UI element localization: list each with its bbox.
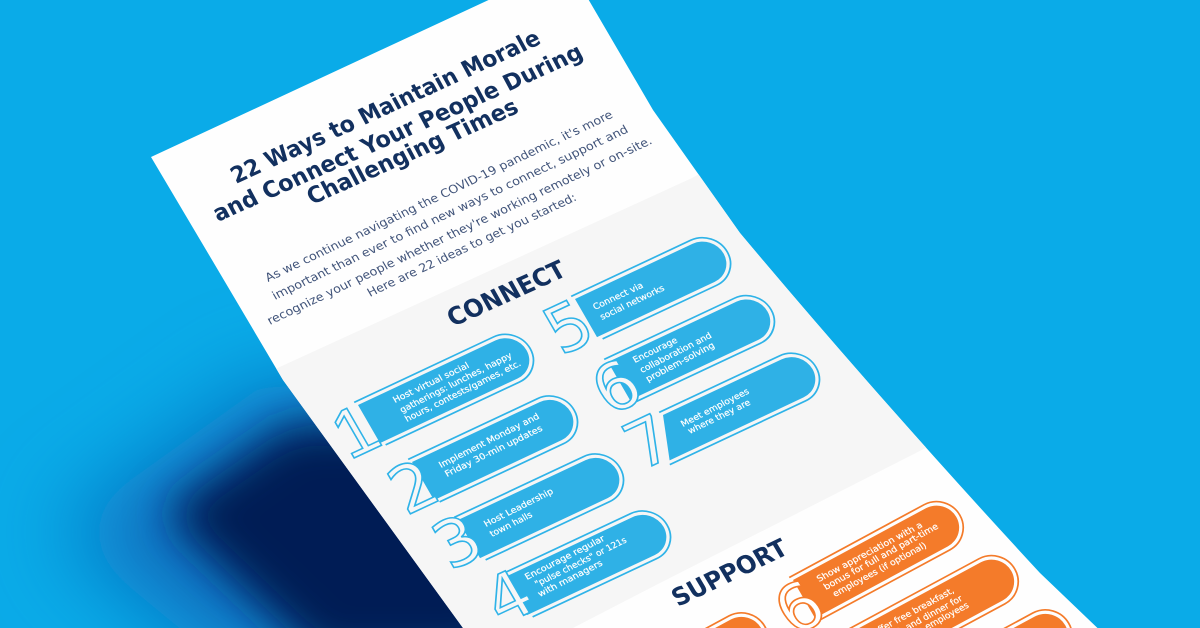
item 1: gatherings: lunches, happy xyxy=(398,351,514,416)
item 4: "pulse checks" or 121s xyxy=(533,536,629,590)
gray connect band xyxy=(276,174,926,628)
item 5: 5 xyxy=(530,285,607,370)
intro paragraph: As we continue navigating the COVID-19 pandemic, it's more xyxy=(262,108,615,285)
heading: support: SUPPORT xyxy=(666,533,793,612)
paper shadow xyxy=(60,380,530,628)
item 7: Meet employees xyxy=(679,387,752,430)
item 7 xyxy=(610,345,829,485)
intro paragraph: important than ever to find new ways to connect, support and xyxy=(269,122,631,303)
item 6: Encourage xyxy=(631,336,680,366)
item 5: social networks xyxy=(598,284,667,323)
support item 7 xyxy=(844,546,1028,628)
item 2: 2 xyxy=(375,445,452,530)
item 3: town halls xyxy=(488,510,535,540)
title: Challenging Times xyxy=(303,94,523,210)
item 3 xyxy=(419,446,633,585)
item 6: 6 xyxy=(578,345,655,430)
item 6: problem-solving xyxy=(644,341,717,385)
item 6 xyxy=(578,287,784,430)
intro paragraph: Here are 22 ideas to get you started: xyxy=(364,190,579,300)
item 2: Implement Monday and xyxy=(437,412,542,471)
item 4: with managers xyxy=(536,559,605,600)
support item: partial pill right xyxy=(978,601,1082,628)
title: and Connect Your People During xyxy=(209,40,588,227)
support item 6: bonus for full and part-time xyxy=(822,522,941,592)
item 1: hours, contests/games, etc. xyxy=(403,359,523,425)
item 5: Connect via xyxy=(591,281,645,313)
item 1: 1 xyxy=(318,389,392,473)
item 5 xyxy=(530,229,740,370)
heading: connect: CONNECT xyxy=(442,255,571,332)
item 7: where they are xyxy=(686,398,753,437)
item 3: 3 xyxy=(419,500,496,585)
support item 6: employees (if optional) xyxy=(831,541,929,600)
intro paragraph: recognize your people whether they're working remotely or on-site. xyxy=(264,134,655,328)
item 4 xyxy=(470,503,680,628)
item 1 xyxy=(318,326,543,473)
item 3: Host Leadership xyxy=(482,487,556,530)
item 7: 7 xyxy=(610,400,687,485)
item 2: Friday 30-min updates xyxy=(443,424,545,480)
item 4: Encourage regular xyxy=(523,534,607,583)
item 6: collaboration and xyxy=(638,331,714,376)
support item 6: Show appreciation with a xyxy=(815,521,925,585)
support item: partial pill left xyxy=(674,604,778,628)
title: 22 Ways to Maintain Morale xyxy=(226,26,545,189)
support item 6 xyxy=(760,492,973,628)
item 1: Host virtual social xyxy=(391,361,471,406)
item 2 xyxy=(375,388,587,530)
